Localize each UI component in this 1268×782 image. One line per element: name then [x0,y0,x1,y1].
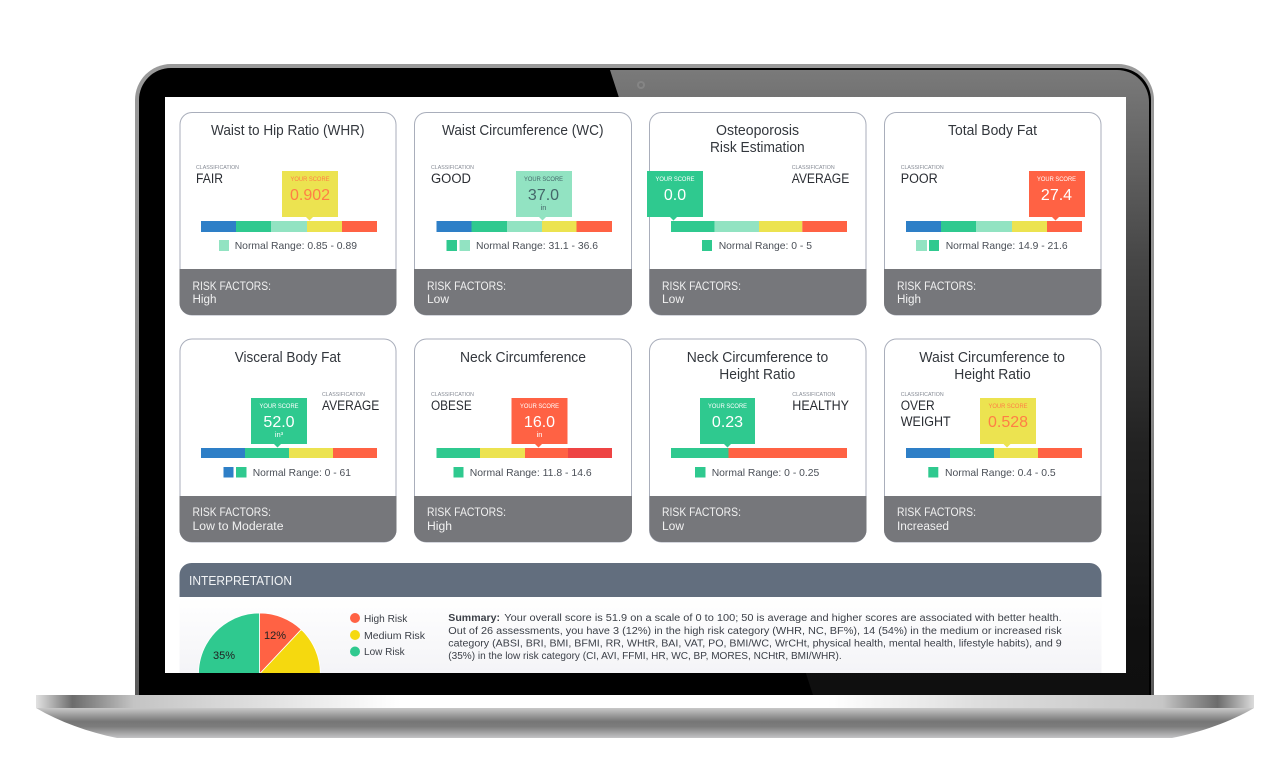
panel: Total Body Fat: Normal Range: 14.9 - 21.6 [946,240,1068,252]
summary text [448,613,1063,662]
summary text: Your overall score is 51.9 on a scale of 0 to 100; 50 is average and higher scores are associated with better health. [504,613,1062,624]
panel: Waist to Hip Ratio: High [192,294,216,306]
panel: Visceral Body Fat [180,339,396,542]
panel: Neck Circumference to Height Ratio: HEALTHY [792,398,849,413]
laptop lid and bezel [135,64,1154,720]
screen content [180,112,1102,735]
panel: Waist Circumference to Height Ratio: RISK FACTORS: [897,507,976,519]
panel: Osteoporosis Risk Estimation: Low [662,294,685,306]
pie chart: risk breakdown [198,614,320,673]
panel: Total Body Fat: POOR [901,171,938,186]
panel: Osteoporosis Risk Estimation: RISK FACTORS: [662,281,741,293]
panel: Waist Circumference to Height Ratio: Waist Circumference to [919,350,1065,366]
laptop base [36,695,1254,738]
panel: Waist to Hip Ratio: Normal Range: 0.85 - 0.89 [235,240,357,252]
panel: Neck Circumference to Height Ratio: Height Ratio [719,367,795,383]
panel: Neck Circumference: in [537,430,542,439]
panel: Neck Circumference to Height Ratio [650,339,866,542]
panel: Waist to Hip Ratio: YOUR SCORE [290,177,330,183]
panel: Waist Circumference [414,112,632,315]
panel: Visceral Body Fat: Visceral Body Fat [235,350,341,366]
panel: Neck Circumference: 16.0 [524,414,555,431]
panel: Waist Circumference: in [541,203,546,212]
panel: Waist to Hip Ratio [180,112,396,315]
panel: Total Body Fat: CLASSIFICATION [901,165,944,171]
panel: Waist Circumference to Height Ratio: Height Ratio [954,367,1031,383]
panel: Waist to Hip Ratio: RISK FACTORS: [192,281,271,293]
panel: Neck Circumference to Height Ratio: Low [662,521,685,533]
panel: Waist Circumference to Height Ratio: Normal Range: 0.4 - 0.5 [945,467,1056,479]
pie legend: Medium Risk [364,630,426,642]
panel: Osteoporosis Risk Estimation: CLASSIFICATION [792,165,835,171]
panel: Waist to Hip Ratio: Waist to Hip Ratio (WHR) [211,123,364,139]
panel: Waist Circumference: Low [427,294,450,306]
panel: Neck Circumference to Height Ratio: Neck Circumference to [687,350,828,366]
panel: Waist Circumference to Height Ratio: OVER [901,398,935,413]
panel: Osteoporosis Risk Estimation: Risk Estimation [710,140,805,156]
panel: Total Body Fat: Total Body Fat [948,123,1037,139]
panel: Waist Circumference to Height Ratio: WEIGHT [901,414,951,429]
panel: Osteoporosis Risk Estimation: Osteoporosis [716,123,799,139]
panel: Neck Circumference: YOUR SCORE [520,404,559,410]
panel: Waist Circumference: RISK FACTORS: [427,281,506,293]
panel: Waist Circumference: CLASSIFICATION [431,165,474,171]
panel: Waist to Hip Ratio: 0.902 [290,187,330,204]
panel: Visceral Body Fat: RISK FACTORS: [192,507,271,519]
heading: interpretation: INTERPRETATION [189,573,292,588]
panel: Visceral Body Fat: in³ [275,430,284,439]
panel: Osteoporosis Risk Estimation: Normal Range: 0 - 5 [719,240,812,252]
summary text: category (ABSI, BRI, BMI, BFMI, RR, WHtR, BAI, VAT, PO, BMI/WC, WrCHt, physical health, mental health, lifestyle habits), and 9 [448,638,1062,650]
panel: Visceral Body Fat: CLASSIFICATION [322,392,365,398]
panel: Neck Circumference to Height Ratio: 0.23 [712,414,743,431]
panel: Waist to Hip Ratio: FAIR [196,171,223,186]
panel: Waist Circumference: 37.0 [528,187,559,204]
pie label: 35%: 35% [213,650,235,662]
panel: Waist Circumference to Height Ratio: YOUR SCORE [988,404,1028,410]
panel: Total Body Fat [884,112,1102,315]
interpretation header bar [180,563,1102,597]
panel: interpretation [180,563,1102,673]
panel: Neck Circumference: OBESE [431,398,472,413]
panel: Waist Circumference: YOUR SCORE [524,177,563,183]
panel: Neck Circumference to Height Ratio: YOUR SCORE [708,404,747,410]
panel: Neck Circumference: CLASSIFICATION [431,392,474,398]
panel: Total Body Fat: YOUR SCORE [1037,177,1076,183]
panel: Visceral Body Fat: AVERAGE [322,398,379,413]
panel: Neck Circumference to Height Ratio: RISK FACTORS: [662,507,741,519]
panel: Waist to Hip Ratio: CLASSIFICATION [196,165,239,171]
pie legend: High Risk [364,613,408,625]
panel: Neck Circumference: RISK FACTORS: [427,507,506,519]
panel: Neck Circumference: Neck Circumference [460,350,586,366]
summary text: Summary: [448,613,500,624]
pie legend [350,613,426,658]
panel: Neck Circumference: Normal Range: 11.8 - 14.6 [470,467,592,479]
panel: Visceral Body Fat: Normal Range: 0 - 61 [253,467,351,479]
panel: Osteoporosis Risk Estimation: YOUR SCORE [656,177,694,183]
panel: Visceral Body Fat: Low to Moderate [192,521,284,533]
panel: Waist Circumference to Height Ratio: 0.528 [988,414,1028,431]
panel: Waist Circumference to Height Ratio: Increased [897,521,949,533]
panel: Visceral Body Fat: YOUR SCORE [260,404,298,410]
panel: Osteoporosis Risk Estimation [647,112,866,315]
summary text: (35%) in the low risk category (CI, AVI, FFMI, HR, WC, BP, MORES, NCHtR, BMI/WHR). [448,651,842,662]
panel: Osteoporosis Risk Estimation: AVERAGE [792,171,849,186]
panel: Osteoporosis Risk Estimation: 0.0 [664,187,686,204]
pie legend: Low Risk [364,646,405,658]
icon: webcam [637,81,645,89]
panel: Neck Circumference: High [427,521,452,533]
laptop screen [165,97,1126,673]
panel: Total Body Fat: RISK FACTORS: [897,281,976,293]
panel: Total Body Fat: High [897,294,921,306]
panel: Waist Circumference: Waist Circumference (WC) [442,123,604,139]
pie label: 12%: 12% [264,630,286,642]
panel: Waist Circumference: GOOD [431,171,471,186]
panel: Total Body Fat: 27.4 [1041,187,1072,204]
panel: Waist Circumference: Normal Range: 31.1 - 36.6 [476,240,598,252]
panel: Neck Circumference [414,339,632,542]
panel: Waist Circumference to Height Ratio [884,339,1102,542]
summary text: Out of 26 assessments, you have 3 (12%) in the high risk category (WHR, NC, BF%), 14 (54%) in the medium or increased risk [448,626,1063,637]
panel: Neck Circumference to Height Ratio: CLASSIFICATION [792,392,835,398]
panel: Visceral Body Fat: 52.0 [263,414,295,431]
panel: Waist Circumference to Height Ratio: CLASSIFICATION [901,392,944,398]
panel: Neck Circumference to Height Ratio: Normal Range: 0 - 0.25 [712,467,819,479]
